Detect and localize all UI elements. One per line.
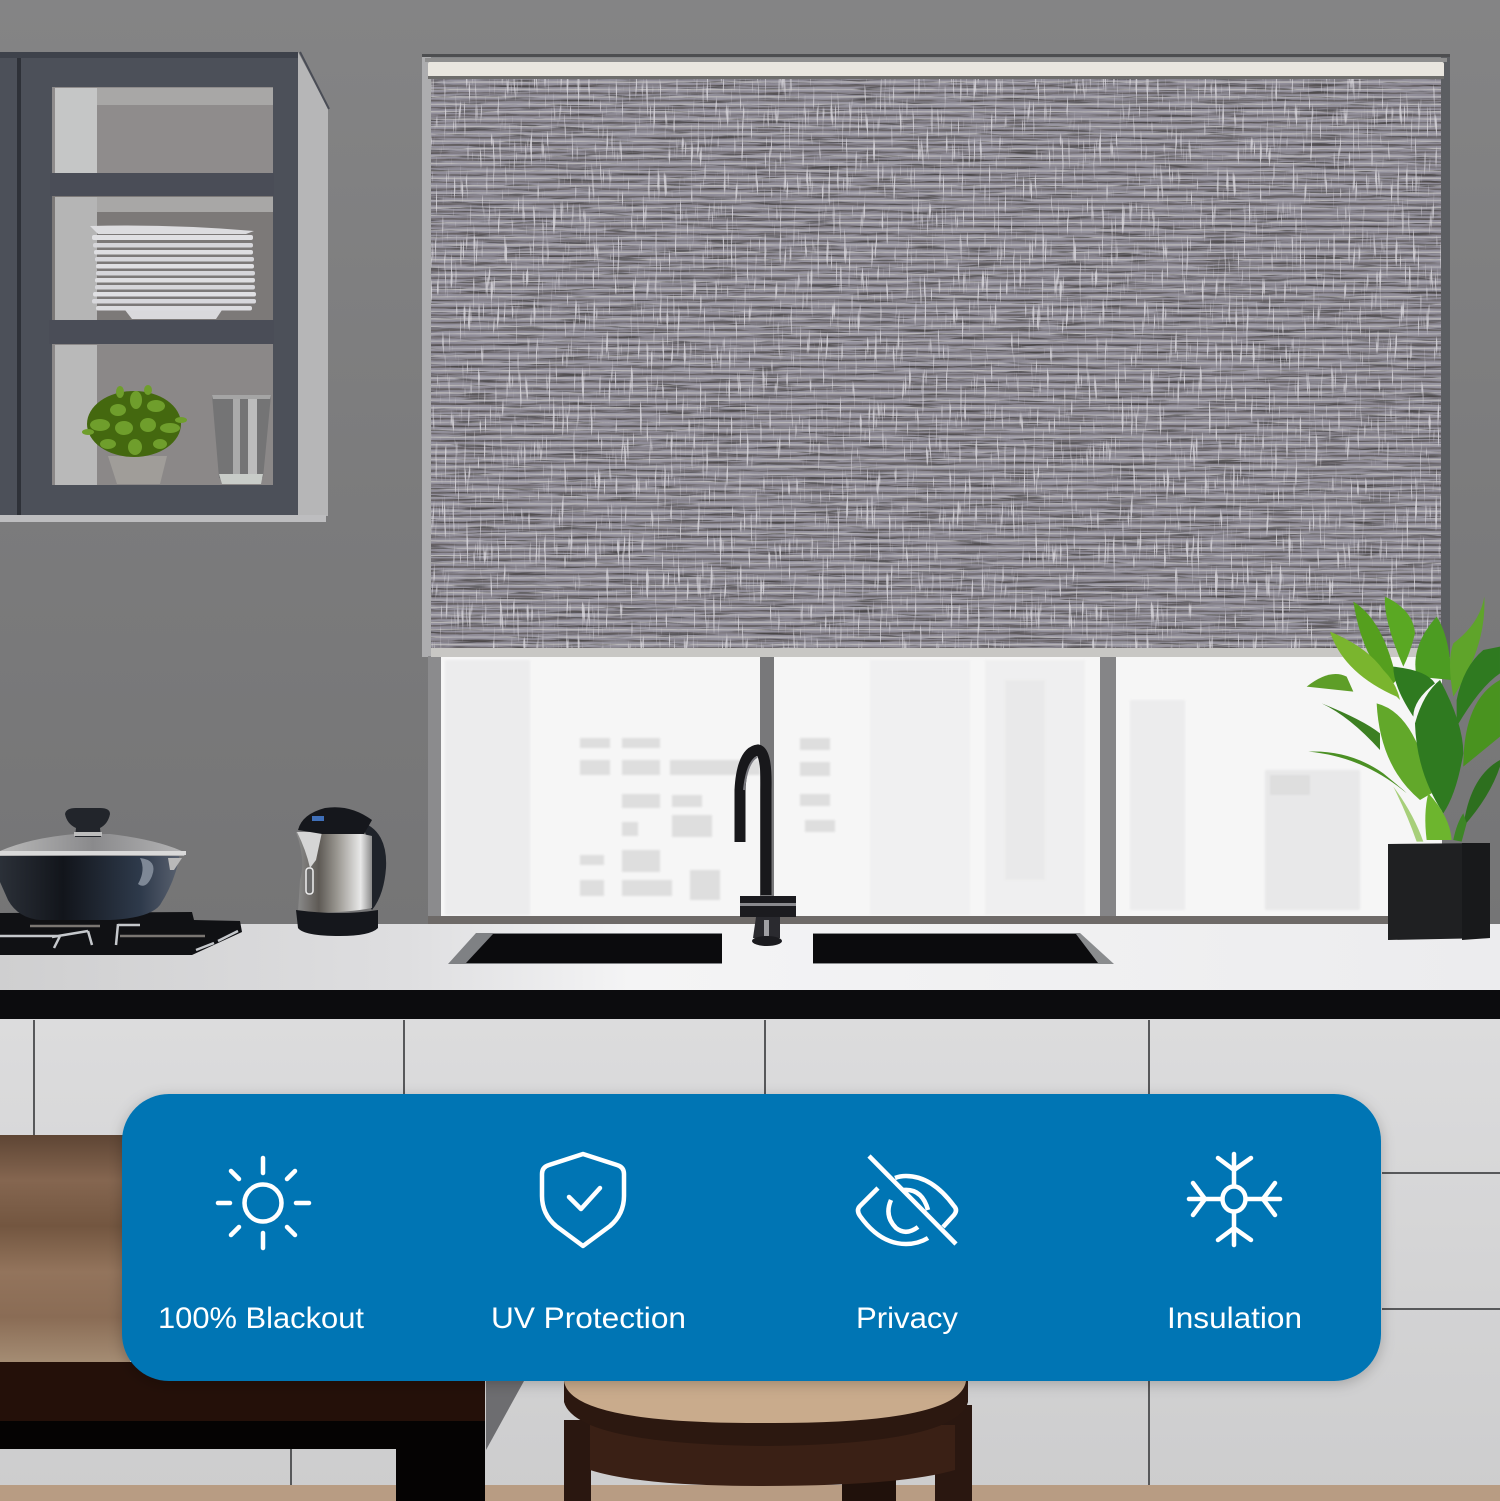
label: Privacy: Privacy: [856, 1302, 958, 1335]
feature: Insulation: [1167, 1154, 1302, 1335]
roller blind fabric: [431, 79, 1441, 649]
cabinet top opening: [52, 87, 273, 173]
window recess frame: [422, 54, 1450, 657]
cabinet door frame: [0, 52, 298, 516]
wooden stool: [564, 1381, 972, 1501]
cabinet shelf divider: [50, 173, 274, 196]
window and roller blind: [422, 54, 1450, 924]
icon: snowflake: [1189, 1154, 1280, 1245]
faucet: [740, 750, 796, 946]
cabinet lower shelf divider: [49, 320, 274, 344]
cabinet lower opening: [52, 344, 273, 485]
gas stove: [0, 912, 242, 955]
base cabinets: [0, 1019, 1500, 1501]
icon: shield with check: [542, 1154, 624, 1246]
worktop: [0, 924, 1500, 1019]
blind bottom rail: [431, 648, 1441, 657]
double sink: [448, 933, 1114, 964]
drinking glass: [212, 395, 271, 484]
electric kettle: [296, 807, 386, 936]
panel background: [122, 1094, 1381, 1381]
label: Insulation: Insulation: [1167, 1302, 1302, 1335]
feature: Privacy: [856, 1156, 958, 1335]
window panes: [428, 656, 1442, 924]
label: UV Protection: UV Protection: [491, 1302, 686, 1335]
features panel: [122, 1094, 1381, 1381]
wooden table: [0, 1135, 524, 1501]
label: 100% Blackout: 100% Blackout: [158, 1302, 365, 1335]
cooking pot: [0, 808, 186, 920]
icon: sun: [218, 1158, 309, 1248]
wall background: [0, 0, 1500, 930]
feature: 100% Blackout: [158, 1158, 365, 1335]
wall cabinet: [0, 52, 329, 522]
icon: crossed-out eye: [858, 1156, 956, 1244]
blind head rail: [425, 58, 1447, 79]
potted shelf plant: [82, 385, 187, 484]
cabinet side panel: [298, 52, 328, 516]
potted window plant: [1307, 597, 1500, 940]
stack of plates: [90, 226, 256, 319]
feature: UV Protection: [491, 1154, 686, 1335]
plant pot: [1388, 843, 1490, 940]
cabinet bottom trim: [0, 515, 326, 522]
cabinet middle opening: [52, 196, 273, 320]
